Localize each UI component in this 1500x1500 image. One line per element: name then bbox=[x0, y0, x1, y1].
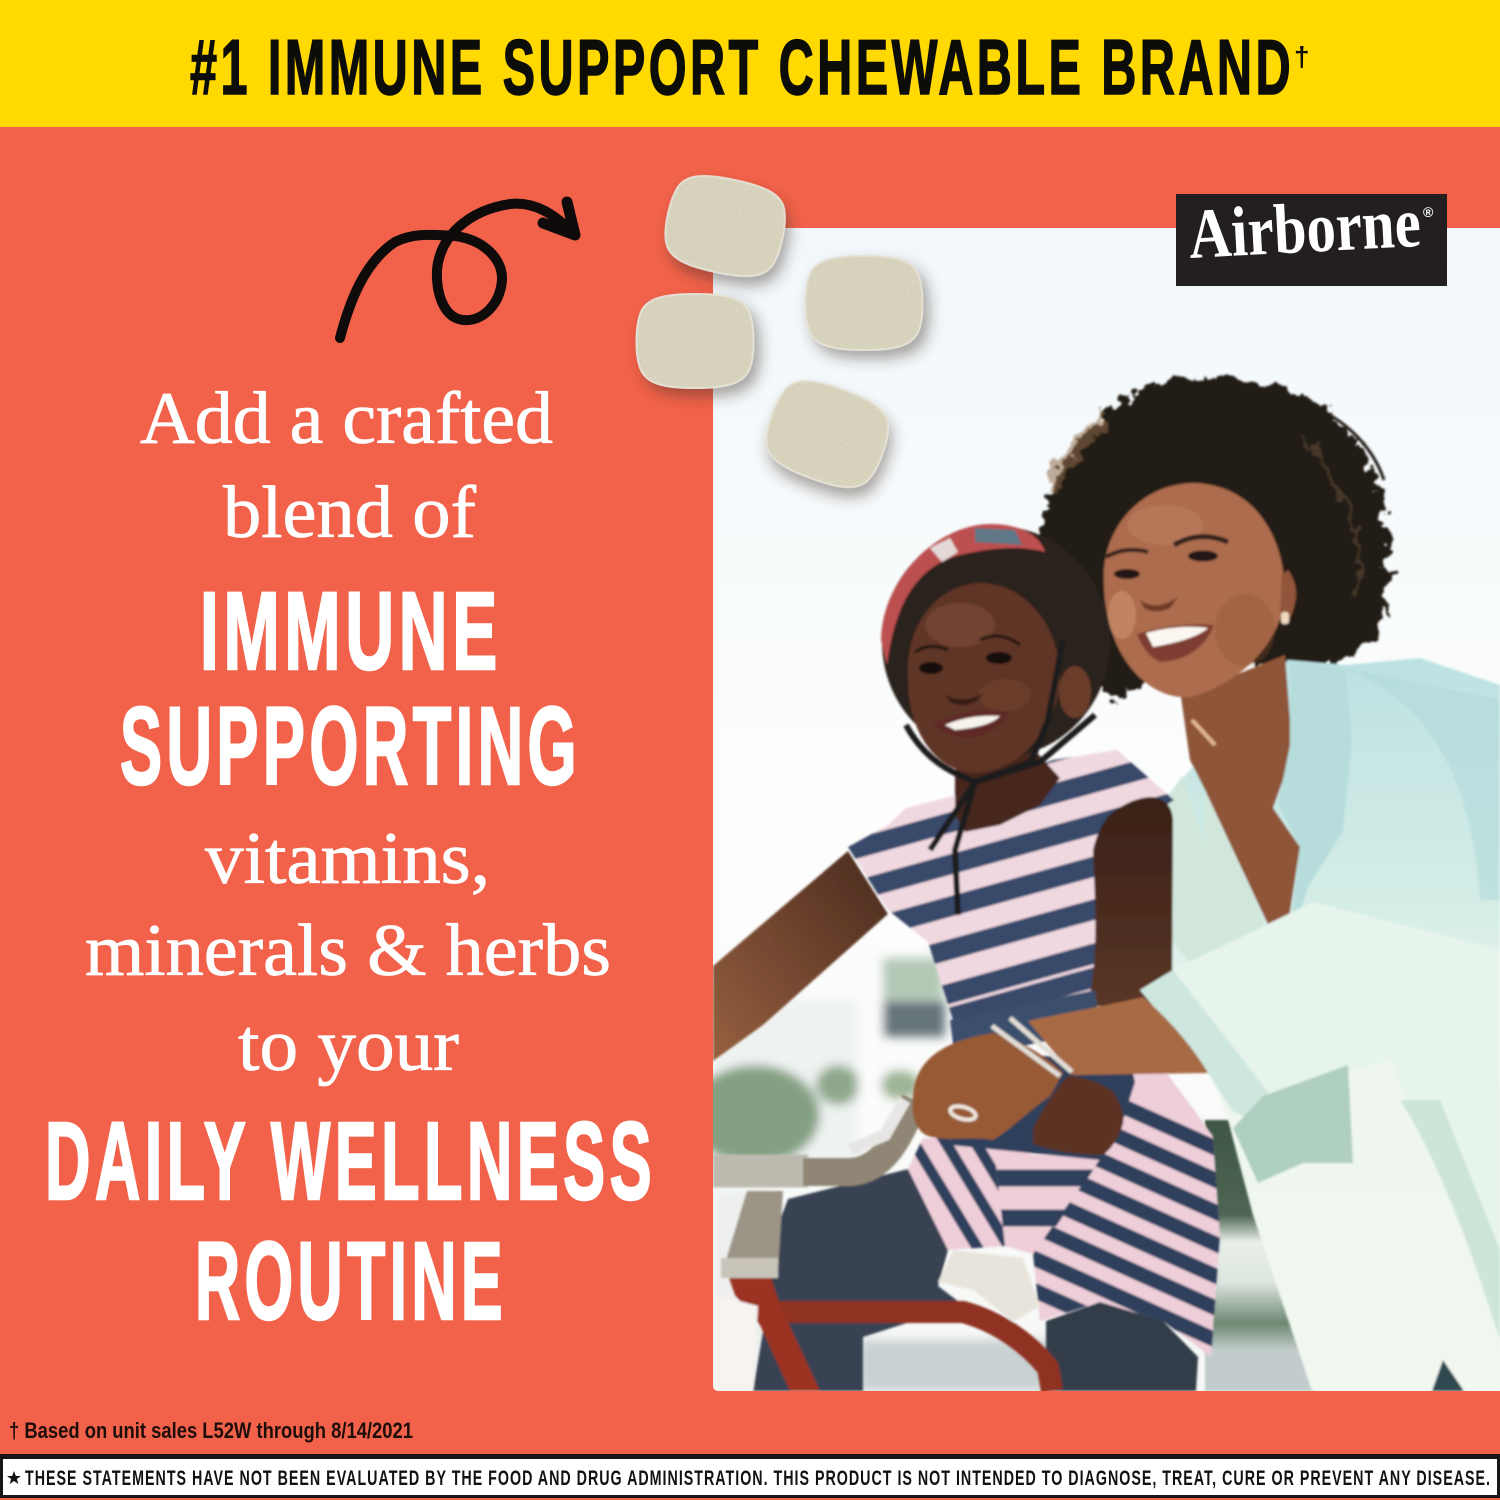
header band bbox=[0, 0, 1500, 127]
child's face bbox=[908, 583, 1091, 773]
bracelets bbox=[992, 1018, 1072, 1076]
child's far arm bbox=[1088, 797, 1173, 1010]
woman's right collar bbox=[1278, 662, 1352, 950]
photo: mother and child on a bicycle bbox=[690, 228, 1500, 1391]
child's belt bbox=[950, 990, 1100, 1060]
child's striped top bbox=[846, 750, 1175, 1021]
child's right legging bbox=[1046, 1302, 1198, 1391]
main message text: ROUTINE bbox=[195, 1220, 507, 1343]
woman's face bbox=[1104, 483, 1296, 745]
woman's hand bbox=[913, 1033, 1063, 1140]
bicycle seat bbox=[938, 1250, 1040, 1322]
disclaimer bar bbox=[0, 1454, 1500, 1498]
logo wordmark: Airborne bbox=[1187, 184, 1423, 274]
woman's neck and chest bbox=[1181, 655, 1300, 946]
child's helmet bbox=[881, 524, 1110, 758]
handlebar bbox=[713, 1100, 915, 1172]
tablet 4 bbox=[756, 370, 898, 498]
tablet 3 bbox=[636, 294, 754, 388]
backdrop behind shirt bbox=[1205, 1120, 1315, 1391]
shadowed dress behind hands bbox=[950, 1050, 1135, 1160]
main message text bbox=[45, 378, 656, 1343]
helmet straps bbox=[906, 640, 1095, 915]
child's neck bbox=[955, 745, 1060, 832]
chewable tablets bbox=[636, 168, 922, 498]
logo: Airborne bbox=[1176, 184, 1447, 286]
logo registered mark: ® bbox=[1423, 204, 1434, 220]
woman's sleeve and cuff bbox=[1140, 902, 1500, 1391]
child's arm, near side bbox=[713, 851, 888, 1061]
main message text: IMMUNE bbox=[200, 570, 502, 693]
header dagger mark: † bbox=[1294, 41, 1310, 72]
tablet 1 bbox=[658, 168, 792, 284]
woman's hair bbox=[1040, 376, 1398, 700]
ring bbox=[949, 1104, 977, 1122]
disclaimer star icon bbox=[7, 1471, 21, 1484]
main message text: vitamins, bbox=[205, 818, 490, 900]
child's hand bbox=[1033, 1076, 1123, 1155]
main message text: Add a crafted bbox=[140, 378, 553, 460]
main message text: DAILY WELLNESS bbox=[45, 1100, 656, 1223]
main message text: minerals & herbs bbox=[85, 910, 611, 992]
tablet 2 bbox=[806, 256, 922, 350]
child's skirt bbox=[900, 1060, 1240, 1383]
child's left legging bbox=[753, 1169, 963, 1391]
woman's forearm bbox=[1028, 997, 1208, 1075]
main message text: to your bbox=[238, 1005, 459, 1087]
icon: looping arrow bbox=[340, 202, 575, 338]
woman's shirt bbox=[1165, 658, 1500, 1391]
main message text: SUPPORTING bbox=[120, 685, 581, 808]
main message text: blend of bbox=[223, 472, 476, 554]
bicycle frame bbox=[713, 1191, 1052, 1391]
footnote: † Based on unit sales L52W through 8/14/2021 bbox=[9, 1418, 413, 1443]
